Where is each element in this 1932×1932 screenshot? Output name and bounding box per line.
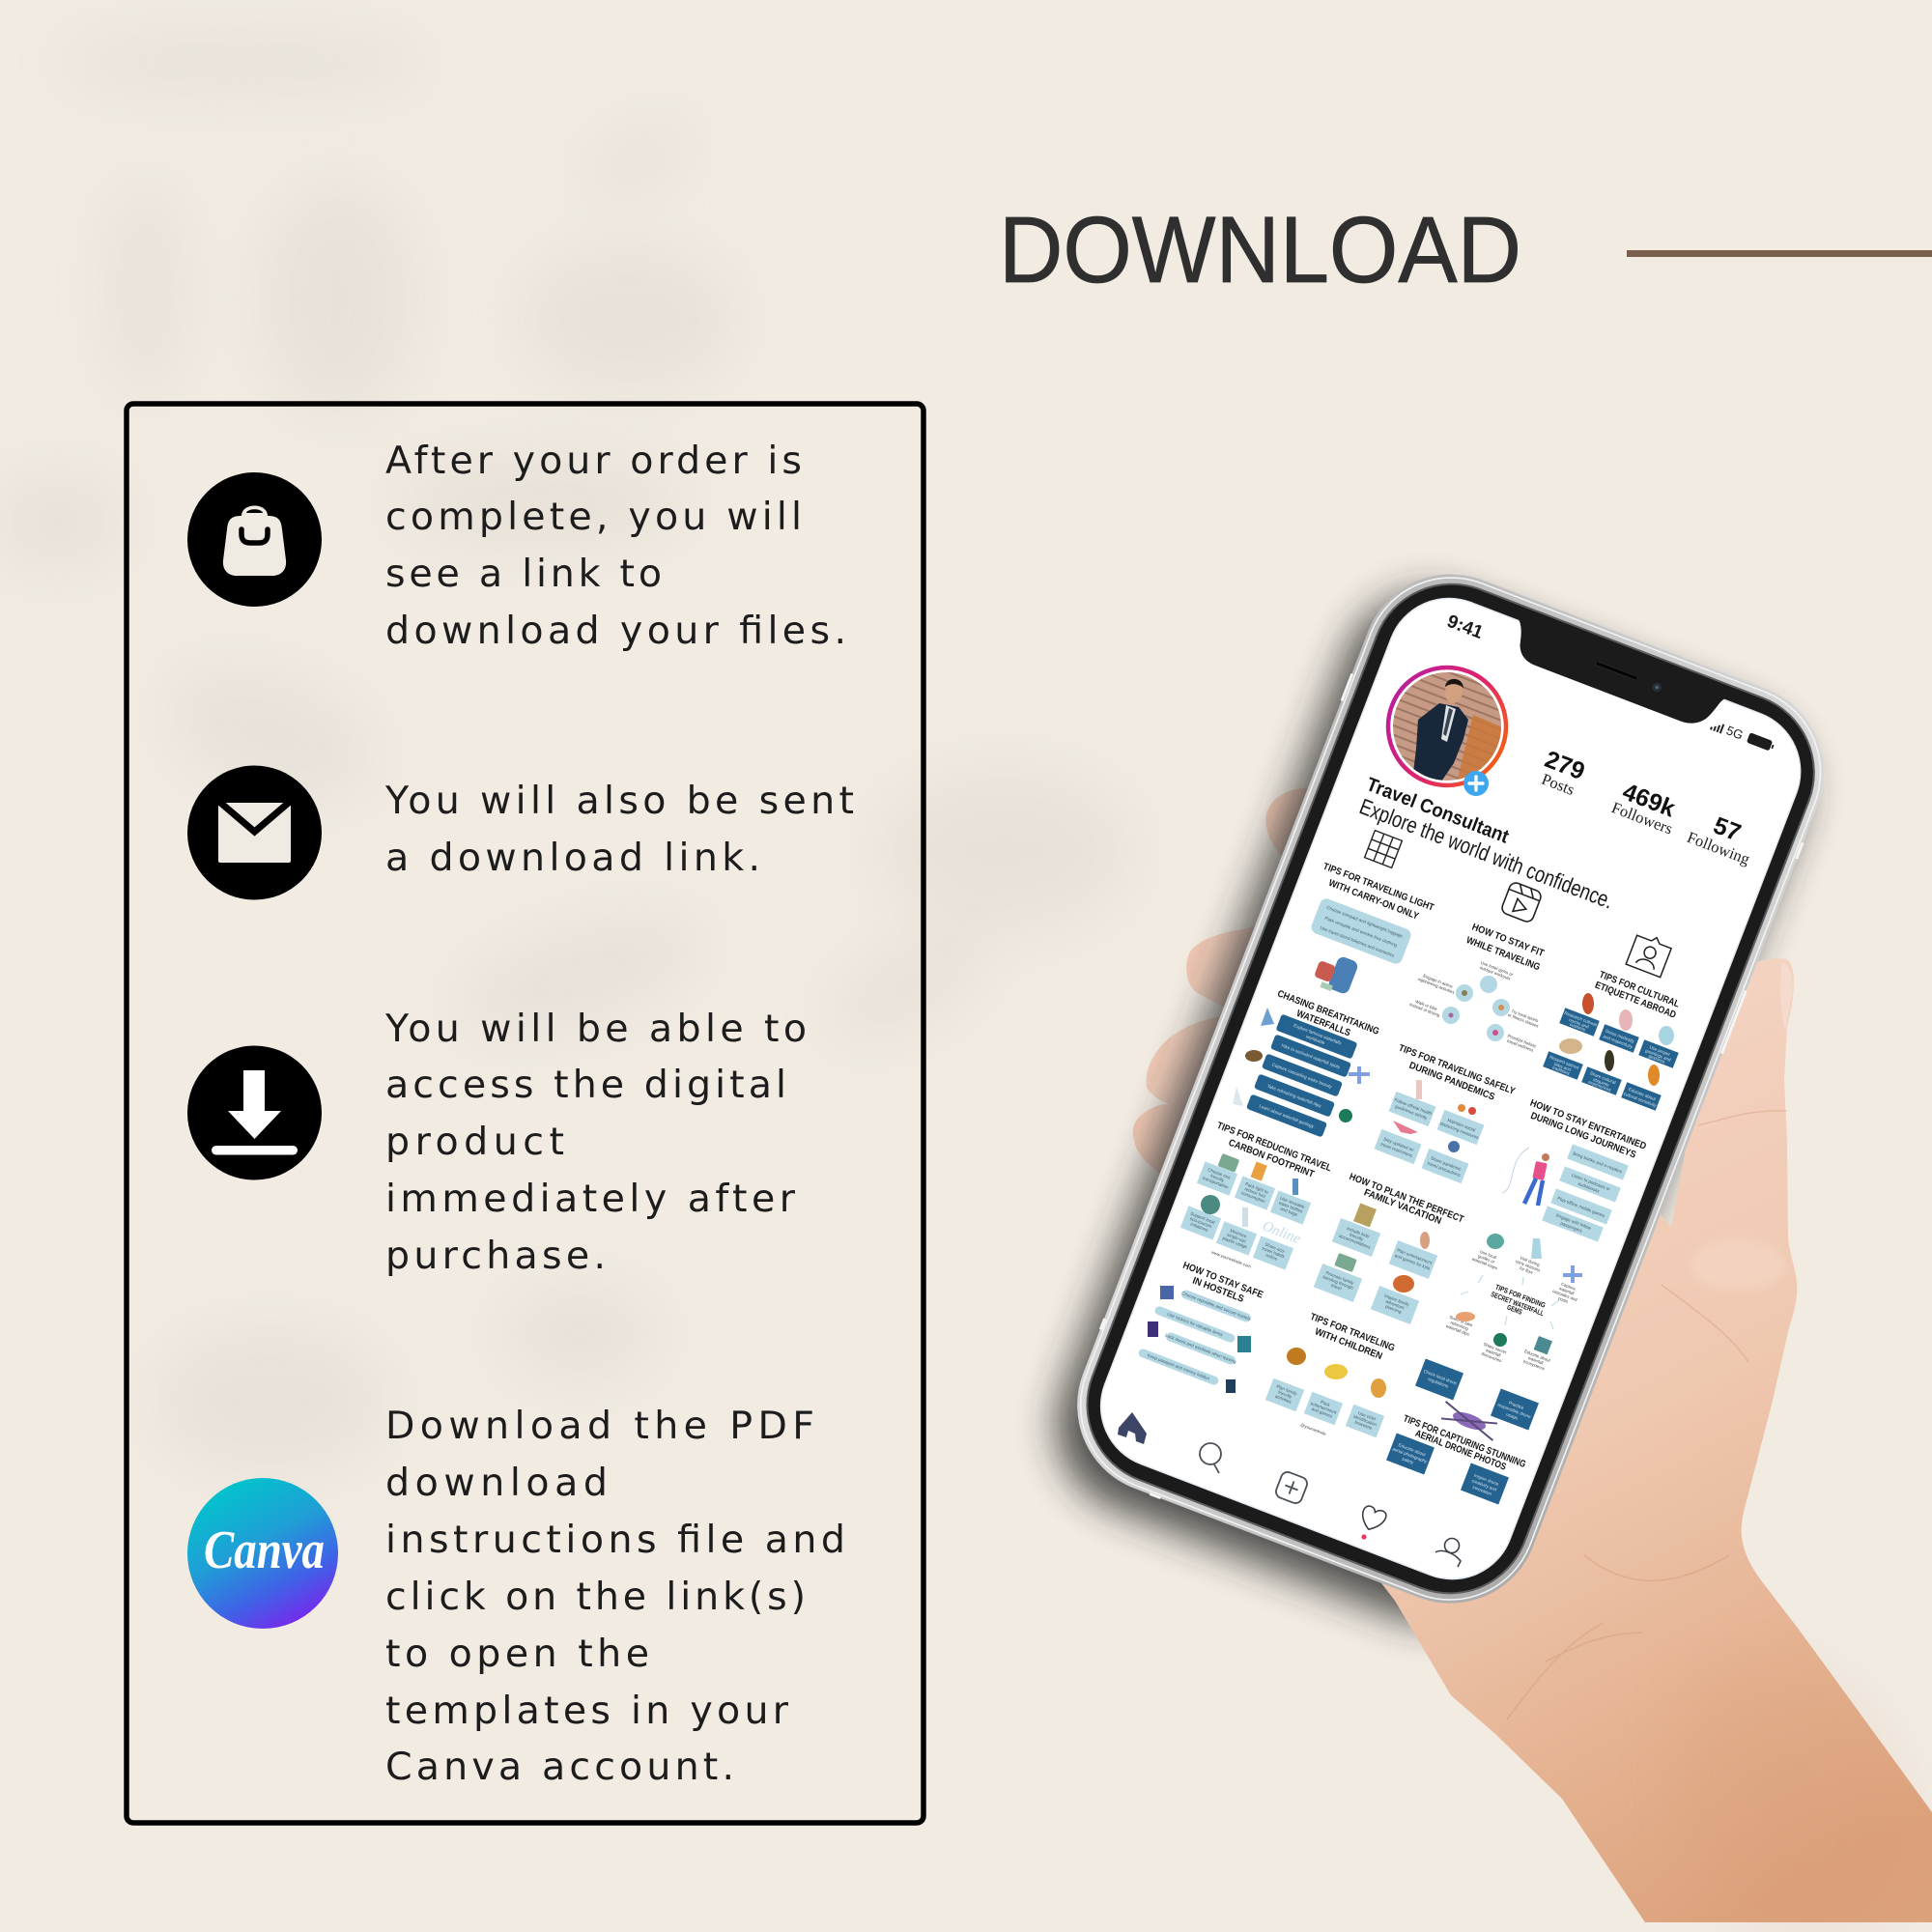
post: traveling light: TIPS FOR TRAVELING LIGHT	[1321, 862, 1435, 914]
post: carbon footprint: friendly	[1209, 1174, 1226, 1183]
icon: tagged tab	[1626, 931, 1673, 978]
step 2 text: You will also be sent	[384, 779, 854, 823]
post: long journeys: passengers	[1560, 1221, 1583, 1234]
profile bio: Explore the world with confidence.	[1356, 793, 1617, 914]
step 4 text: click on the link(s)	[385, 1575, 806, 1619]
profile avatar	[1385, 665, 1509, 788]
post: waterfall gems: Capture	[1560, 1281, 1577, 1292]
post: waterfalls: Take refreshing waterfall dips	[1266, 1083, 1322, 1109]
heading: DOWNLOAD	[999, 197, 1521, 302]
post: drone photos: regulations	[1427, 1377, 1450, 1389]
step 3 text: immediately after	[385, 1177, 796, 1221]
palm highlight	[1690, 1240, 1787, 1291]
post: waterfall gems: SECRET WATERFALL	[1490, 1290, 1546, 1318]
side bands	[1050, 669, 1804, 1631]
post: traveling safely: Share pandemic	[1430, 1155, 1463, 1172]
blurred palm shadows	[0, 32, 1130, 1473]
profile stats	[1539, 746, 1752, 868]
post: family vacation: travel	[1330, 1283, 1343, 1292]
icon: Canva logo: Canva	[204, 1520, 325, 1580]
panel: steps	[127, 404, 923, 1823]
post: waterfalls: Explore famous waterfalls	[1293, 1023, 1343, 1046]
post: children: activities	[1274, 1394, 1293, 1405]
post: cultural etiquette: Share cultural	[1589, 1070, 1616, 1085]
post: long journeys: HOW TO STAY ENTERTAINED	[1528, 1098, 1648, 1152]
post: stay fit: or fitness classes	[1507, 1012, 1540, 1029]
post: children: entertainment	[1310, 1401, 1338, 1415]
post: family vacation: HOW TO PLAN THE PERFECT	[1348, 1172, 1465, 1225]
post: waterfall gems: cascades and	[1551, 1289, 1578, 1302]
post: carbon footprint: CARBON FOOTPRINT	[1227, 1138, 1316, 1180]
post: children: TIPS FOR TRAVELING	[1309, 1312, 1396, 1354]
step 3 text	[384, 1007, 807, 1278]
post: children: identification	[1352, 1414, 1378, 1428]
post: cultural etiquette: customs	[1569, 1022, 1587, 1033]
post: carbon footprint: Online	[1261, 1218, 1303, 1247]
post: waterfall gems: waterfall	[1485, 1348, 1501, 1358]
icon: add post	[1274, 1470, 1309, 1505]
post: family vacation: friendly	[1349, 1233, 1365, 1242]
post: traveling light: Pack versatile and wrinkle-free clothing	[1324, 916, 1398, 948]
post: stay fit: Engage in active	[1422, 973, 1454, 989]
post: cultural etiquette: Dress modestly	[1605, 1029, 1635, 1044]
post: carbon footprint: initiatives	[1190, 1221, 1209, 1233]
post: waterfall gems: ecosystems	[1522, 1358, 1546, 1372]
post: drone photos: safety	[1402, 1456, 1415, 1465]
post: waterfall gems	[1445, 1234, 1582, 1373]
post: carbon footprint	[1180, 1121, 1333, 1270]
status bar: 5G	[1724, 723, 1746, 743]
step 1 text: complete, you will	[385, 495, 802, 539]
post: drone photos: Practice	[1508, 1400, 1525, 1410]
post: hostels: Use lockers for valuable items	[1166, 1312, 1224, 1338]
post: traveling light: WITH CARRY-ON ONLY	[1327, 878, 1420, 923]
post: carbon footprint: transportation	[1202, 1176, 1230, 1190]
post: traveling light: Use travel-sized toiletries and cosmetics	[1320, 925, 1396, 958]
post: family vacation: and games for kids	[1394, 1253, 1432, 1271]
post: drone photos: innovation	[1472, 1485, 1492, 1496]
speaker and camera	[1594, 660, 1662, 693]
screen	[1083, 581, 1818, 1597]
icon: grid tab	[1365, 831, 1402, 867]
post: cultural etiquette: TIPS FOR CULTURAL	[1598, 970, 1681, 1010]
post: waterfall gems: Share secret	[1483, 1342, 1508, 1355]
post: carbon footprint: Minimize	[1230, 1228, 1248, 1239]
post: waterfall gems: refreshing	[1450, 1320, 1469, 1331]
post: drone photos: AERIAL DRONE PHOTOS	[1413, 1429, 1508, 1473]
step 3 text: product	[385, 1120, 564, 1164]
step 3 text: You will be able to	[384, 1007, 807, 1051]
icon: download arrow	[187, 1045, 322, 1180]
post: traveling safely: distancing measures	[1439, 1121, 1480, 1140]
post: children: friendly	[1277, 1390, 1293, 1400]
post: carbon footprint: plastic usage	[1222, 1236, 1248, 1249]
icon: search	[1200, 1443, 1221, 1473]
post: waterfalls: Hike to secluded waterfall spots	[1281, 1043, 1342, 1070]
post: stay fit: travel wellness	[1506, 1038, 1535, 1053]
step 1 text	[385, 439, 846, 653]
icon: envelope	[187, 765, 322, 900]
post: children	[1265, 1312, 1396, 1437]
post: family vacation: Include kids'	[1346, 1226, 1371, 1239]
icon: Canva logo	[187, 1478, 338, 1629]
fingers behind phone	[1133, 784, 1352, 1198]
post: drone photos: Educate about	[1398, 1442, 1427, 1458]
post: family vacation: Inspire family	[1383, 1293, 1410, 1307]
post: long journeys: Listen to podcasts or	[1571, 1173, 1611, 1192]
post: carbon footprint: Share eco-	[1264, 1242, 1287, 1254]
icon: home	[1118, 1412, 1147, 1444]
post: long journeys: DURING LONG JOURNEYS	[1529, 1111, 1637, 1161]
post: carbon footprint: Pack light to	[1244, 1181, 1269, 1195]
post: drone photos: Inspire drone	[1473, 1473, 1499, 1487]
post: carbon footprint: water bottles	[1278, 1201, 1304, 1214]
post: traveling safely: Maintain social	[1447, 1118, 1476, 1132]
post: family vacation: Promote family	[1325, 1270, 1355, 1286]
post: stay fit: HOW TO STAY FIT	[1470, 922, 1546, 959]
post: long journeys: Bring books and e-readers	[1573, 1151, 1624, 1175]
post: cultural etiquette: cultural sensitivity	[1623, 1091, 1658, 1108]
notch	[1501, 615, 1729, 734]
post: waterfall gems: Educate about	[1523, 1349, 1551, 1363]
post: carbon footprint: Use reusable	[1279, 1196, 1306, 1209]
post: drone photos: creativity and	[1471, 1478, 1497, 1492]
post: cultural etiquette: ETIQUETTE ABROAD	[1593, 980, 1677, 1021]
post: waterfall gems: rainy seasons	[1515, 1259, 1542, 1273]
post: traveling light	[1310, 862, 1435, 997]
post: traveling safely: travel restrictions	[1380, 1142, 1414, 1158]
post: stay fit: Use hotel gyms or	[1480, 960, 1514, 977]
post: family vacation: FAMILY VACATION	[1362, 1187, 1443, 1227]
post: waterfalls: Capture cascading water beauty	[1271, 1062, 1333, 1090]
post: carbon footprint: Choose eco	[1208, 1167, 1232, 1180]
post: cultural etiquette: experiences	[1588, 1079, 1612, 1093]
post: cultural etiquette: and respectfully	[1603, 1034, 1634, 1050]
post: traveling safely	[1375, 1043, 1517, 1183]
icon: shopping bag	[187, 472, 322, 607]
post: children: Plan family	[1276, 1384, 1298, 1396]
post: carbon footprint: consumption	[1240, 1190, 1266, 1204]
step 4 text: download	[385, 1461, 608, 1505]
post: waterfall gems: guides or	[1477, 1254, 1496, 1264]
phone drop shadow	[1031, 568, 1830, 1649]
post: waterfall gems: GEMS	[1506, 1303, 1523, 1317]
post: carbon footprint: and bags	[1280, 1206, 1299, 1217]
post: stay fit: outdoor workouts	[1479, 965, 1512, 981]
step 2 text: a download link.	[385, 836, 760, 880]
post: carbon footprint: online	[1265, 1253, 1278, 1262]
step 1 text: see a link to	[385, 552, 662, 596]
step 4 text: to open the	[385, 1632, 649, 1676]
post: traveling safely: travel precautions	[1427, 1160, 1462, 1178]
icon: heart	[1358, 1504, 1387, 1534]
post: children: Pack	[1320, 1400, 1331, 1407]
post: cultural etiquette: gestures	[1648, 1054, 1666, 1065]
post: stay fit: instead of driving	[1408, 1002, 1441, 1018]
post: cultural etiquette: etiquette	[1592, 1077, 1610, 1088]
post: waterfall gems: discoveries	[1481, 1351, 1503, 1363]
post: traveling light: Choose compact and lightweight luggage	[1326, 905, 1404, 939]
post: carbon footprint: eco-tourism	[1189, 1216, 1212, 1229]
post: waterfall gems: Swim or take	[1449, 1315, 1474, 1328]
step 3 text: access the digital	[385, 1063, 786, 1107]
post: cultural etiquette: Respect sacred	[1548, 1055, 1579, 1070]
profile name: Travel Consultant	[1363, 774, 1512, 848]
bottom navigation	[1118, 1412, 1461, 1567]
phone body	[1050, 548, 1851, 1631]
post: long journeys	[1502, 1098, 1648, 1242]
post: waterfalls	[1233, 988, 1380, 1138]
post: hostels: Lock doors and windows when leaving	[1165, 1333, 1237, 1365]
profile stats: Followers	[1609, 798, 1675, 838]
post: hostels	[1137, 1261, 1264, 1393]
post: waterfall gems: pools	[1557, 1295, 1570, 1304]
icon: profile	[1435, 1538, 1461, 1567]
post: carbon footprint: Support local	[1190, 1211, 1215, 1225]
profile stats: Posts	[1539, 770, 1577, 799]
post: carbon footprint: travel habits	[1262, 1246, 1286, 1260]
post: traveling safely: Stay updated on	[1382, 1136, 1415, 1152]
post: drone photos: aerial photography	[1392, 1446, 1429, 1464]
profile stats: Following	[1685, 828, 1752, 868]
post: traveling safely: guidelines strictly	[1395, 1104, 1429, 1121]
post: long journeys: audiobooks	[1577, 1181, 1601, 1194]
post: carbon footprint: TIPS FOR REDUCING TRAVEL	[1215, 1121, 1333, 1174]
post: family vacation	[1314, 1172, 1465, 1324]
post: waterfall gems: TIPS FOR FINDING	[1494, 1283, 1547, 1310]
post: cultural etiquette: Educate about	[1628, 1087, 1657, 1102]
thumb nail	[1780, 962, 1793, 1032]
wrist tone	[1623, 1618, 1932, 1932]
post: waterfalls: CHASING BREATHTAKING	[1276, 988, 1380, 1037]
post: carbon footprint: single-use	[1227, 1232, 1247, 1244]
post: children: @yourwebsite	[1300, 1422, 1327, 1436]
post: long journeys: Engage with fellow	[1555, 1212, 1592, 1231]
post: cultural etiquette	[1543, 970, 1681, 1111]
notification dot	[1361, 1534, 1367, 1540]
step 4 text: templates in your	[385, 1689, 789, 1733]
post: drone photos: Check local drone	[1423, 1369, 1458, 1386]
post: family vacation: adventure	[1385, 1299, 1406, 1311]
post: family vacation: Plan entertainment	[1396, 1247, 1434, 1265]
post: waterfall gems: waterfall	[1527, 1355, 1544, 1366]
hand	[1352, 958, 1932, 1932]
post: waterfall gems: for flow	[1519, 1265, 1534, 1275]
step 1 text: download your files.	[385, 609, 846, 653]
post: hostels: HOW TO STAY SAFE	[1181, 1261, 1264, 1301]
post: traveling safely: DURING PANDEMICS	[1407, 1061, 1496, 1103]
post: children: WITH CHILDREN	[1313, 1326, 1383, 1362]
icon: reels tab	[1500, 881, 1543, 923]
post: traveling safely: Follow official health	[1394, 1097, 1433, 1117]
post: stay fit: Prioritize holistic	[1507, 1034, 1538, 1049]
step 3 text: purchase.	[385, 1234, 606, 1278]
profile stats: 279	[1541, 746, 1588, 785]
post: waterfalls: Learn about waterfall geology	[1259, 1103, 1316, 1129]
post: drone photos: usage	[1506, 1411, 1519, 1421]
post: family vacation: planning	[1384, 1304, 1403, 1315]
post: stay fit: Try local sports	[1511, 1009, 1540, 1024]
post: stay fit: Walk or bike	[1414, 999, 1438, 1011]
post: waterfall gems: waterfall	[1558, 1286, 1575, 1296]
post: cultural etiquette: greetings and	[1645, 1048, 1672, 1063]
post: children: bracelets	[1354, 1420, 1374, 1431]
post: children: Use child	[1357, 1410, 1377, 1422]
post: carbon footprint: www.yourwebsite.com	[1210, 1249, 1252, 1269]
step 2 text	[384, 779, 854, 880]
post: cultural etiquette: Research cultural	[1564, 1010, 1598, 1027]
post: cultural etiquette: sites and	[1553, 1062, 1572, 1072]
post: traveling safely: TIPS FOR TRAVELING SAFELY	[1397, 1043, 1517, 1097]
add story badge	[1463, 771, 1489, 796]
profile stats: 57	[1710, 811, 1745, 847]
step 4 text	[385, 1404, 845, 1789]
post: stay fit: WHILE TRAVELING	[1464, 935, 1542, 973]
post: carbon footprint: reduce fuel	[1244, 1186, 1266, 1199]
post: cultural etiquette: traditions	[1551, 1065, 1571, 1076]
post: waterfall gems: waterfall maps	[1471, 1257, 1499, 1271]
post: waterfalls: WATERFALLS	[1294, 1009, 1352, 1038]
step 4 text: Canva account.	[385, 1745, 734, 1789]
post: drone photos: responsible drone	[1497, 1403, 1532, 1419]
step 4 text: instructions file and	[385, 1518, 845, 1562]
post: waterfalls: worldwide	[1305, 1034, 1326, 1045]
post: stay fit	[1408, 922, 1546, 1054]
status bar: 9:41	[1444, 611, 1486, 643]
post: stay fit: sightseeing activities	[1417, 977, 1456, 995]
post: long journeys: Play offline mobile games	[1557, 1196, 1606, 1218]
palm creases	[1507, 1111, 1787, 1719]
step 4 text: Download the PDF	[385, 1404, 814, 1448]
status bar	[1444, 611, 1776, 752]
post: children: and games	[1311, 1406, 1334, 1419]
post: family vacation: accommodations	[1338, 1234, 1372, 1250]
step 1 text: After your order is	[385, 439, 802, 483]
post: hostels: Keep passport and money hidden	[1147, 1352, 1210, 1381]
post: waterfall gems: Visit during	[1520, 1255, 1541, 1267]
profile stats: 469k	[1619, 778, 1679, 823]
post: cultural etiquette: norms and	[1568, 1017, 1590, 1030]
heading rule	[1627, 250, 1932, 257]
post: waterfall gems: waterfall dips	[1445, 1323, 1471, 1337]
post: hostels: IN HOSTELS	[1191, 1275, 1245, 1305]
post: family vacation: bonding through	[1322, 1274, 1354, 1291]
post: cultural etiquette: Use proper	[1649, 1044, 1671, 1057]
post: drone photos: TIPS FOR CAPTURING STUNNING	[1402, 1413, 1527, 1470]
post: waterfall gems: Use local	[1479, 1249, 1497, 1260]
post: hostels: Choose reputable and secure hostels	[1181, 1291, 1252, 1321]
post: drone photos	[1386, 1358, 1539, 1505]
